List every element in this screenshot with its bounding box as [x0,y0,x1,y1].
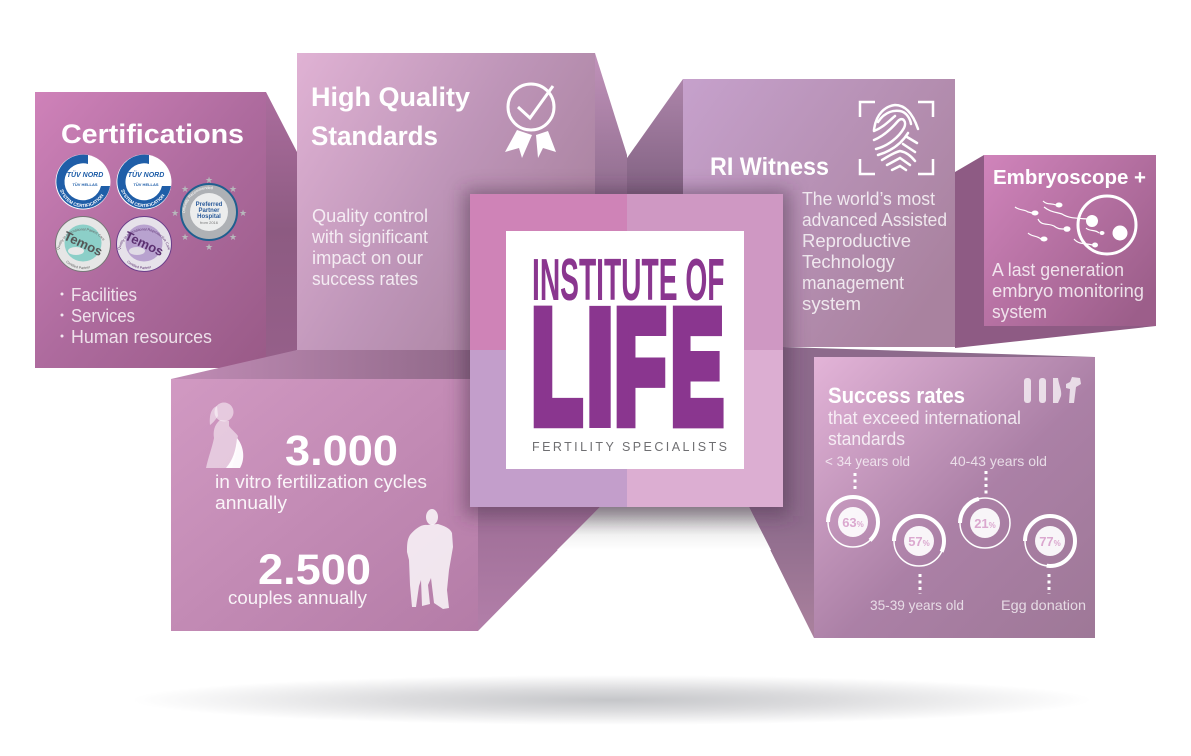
logo: life: E [671,278,724,456]
badge: TUV ISO 9001 [56,154,110,210]
heading: Embryoscope: Embryoscope + [993,167,1146,189]
stat: 3.000 cycles [215,427,427,513]
icon: pregnancy stages [1024,377,1081,403]
badge: Temos purple [116,216,172,272]
certification list: Human resources [71,327,212,347]
chart: 40-43 years: 40-43 years old [950,453,1047,469]
badge: Temos green [55,216,111,272]
icon: pregnant woman [206,402,243,468]
heading: high quality standards: Standards [311,121,438,151]
heading: high quality standards: High Quality [311,82,470,112]
floor shadow [132,675,1092,725]
logo: life [531,278,724,457]
chart: egg donation: Egg donation [1001,597,1086,613]
chart: under 34 years: < 34 years old [825,453,910,469]
badge: preferred partner hospital [171,175,247,252]
panel: high quality standards [297,53,627,350]
logo: life: L [531,278,582,457]
badge: preferred partner hospital: ★ [181,184,189,194]
text: Embryoscope description: embryo monitoring [992,281,1144,301]
badge: preferred partner hospital: Hospital [197,214,221,220]
heading: success rates [828,383,1021,449]
stat: 2.500 couples: 2.500 [258,546,371,594]
heading: success rates: standards [828,429,905,449]
badge: Temos green: Quality in International Patient Care [56,228,104,250]
icon: couple [407,509,453,609]
chart: egg donation: 77% [1039,534,1061,549]
heading: RI Witness: RI Witness [710,153,829,181]
certification list [60,285,212,347]
panel: certifications [35,92,297,368]
text: Embryoscope description [992,260,1144,322]
logo: fertility specialists: FERTILITY SPECIALISTS [532,440,727,454]
panel: success rates [749,347,1095,638]
badge: Temos green: Temos [61,228,105,259]
text: RI Witness description: system [802,294,861,314]
badge: TUV ISO 14001: TÜV NORD [128,170,164,179]
certification list: Services [71,306,135,326]
badge: TUV ISO 14001: SYSTEM CERTIFICATION [121,189,164,208]
chart: egg donation [1001,516,1086,613]
text: quality control: with significant [311,227,428,247]
badge: TUV ISO 9001: TÜV HELLAS [72,182,98,187]
badge: preferred partner hospital: ★ [171,208,179,218]
badge: TUV ISO 9001: SYSTEM CERTIFICATION [60,189,104,208]
panel: annual figures [171,350,600,631]
text: RI Witness description: Technology [802,252,895,272]
text: RI Witness description: Reproductive [802,231,911,251]
icon: award ribbon [505,84,556,158]
heading: certifications: Certifications [61,119,244,149]
chart: 40-43 years: 21% [974,516,996,531]
heading: high quality standards [311,82,470,151]
icon: sperm and egg [1015,196,1136,254]
text: quality control [311,206,428,289]
text: quality control: impact on our [312,248,423,268]
stat: 2.500 couples [228,546,371,608]
centre block shadow [464,190,790,516]
badge: preferred partner hospital: from 2016 [200,220,219,225]
badge: preferred partner hospital: Partner [198,208,220,214]
certification list: Facilities [71,285,137,305]
chart: under 34 years: 63% [842,515,864,530]
heading: success rates: Success rates [828,383,965,408]
stat: 2.500 couples: couples annually [228,587,368,608]
logo: institute of: INSTITUTE OF [532,246,724,313]
badge: preferred partner hospital: Preferred [196,202,223,208]
badge: preferred partner hospital: ★ [229,184,237,194]
icon: fingerprint [860,102,933,174]
chart: 35-39 years: 57% [908,534,930,549]
badge: preferred partner hospital: Officially Recommended [182,186,213,213]
text: RI Witness description: advanced Assisted [802,210,947,230]
stat: 3.000 cycles: in vitro fertilization cycles [215,471,427,492]
chart: 35-39 years [870,516,964,613]
logo: life: I [586,278,614,457]
chart: 40-43 years [950,453,1047,548]
text: RI Witness description: The world’s most [802,189,935,209]
chart: 35-39 years: 35-39 years old [870,597,964,613]
heading: success rates: that exceed international [828,408,1021,428]
chart: under 34 years [825,453,910,547]
gap below centre block [557,507,771,550]
badge: preferred partner hospital: ★ [205,175,213,185]
badge: Temos purple: Quality in International Reproductive Care [118,228,170,250]
badge: preferred partner hospital: ★ [181,232,189,242]
text: RI Witness description: management [802,273,904,293]
text: Embryoscope description: A last generation [992,260,1124,280]
badge: preferred partner hospital: ★ [205,242,213,252]
badge: Temos green: Certified Partner [66,260,90,270]
badge: TUV ISO 9001: TÜV NORD [67,170,103,179]
text: quality control: success rates [312,269,418,289]
panel: Embryoscope [955,155,1156,348]
stat: 3.000 cycles: 3.000 [285,427,398,475]
logo block [470,194,783,507]
badge: Temos purple: Certified Partner [128,260,151,270]
badge: preferred partner hospital: ★ [239,208,247,218]
badge: Temos purple: Temos [122,228,166,259]
panel: RI Witness [627,79,955,347]
text: quality control: Quality control [312,206,428,226]
badge: TUV ISO 14001 [116,154,172,210]
badge: preferred partner hospital: ★ [229,232,237,242]
stat: 3.000 cycles: annually [215,492,288,513]
text: Embryoscope description: system [992,302,1047,322]
badge: TUV ISO 14001: TÜV HELLAS [133,182,159,187]
logo: life: F [614,278,666,457]
text: RI Witness description [802,189,947,314]
